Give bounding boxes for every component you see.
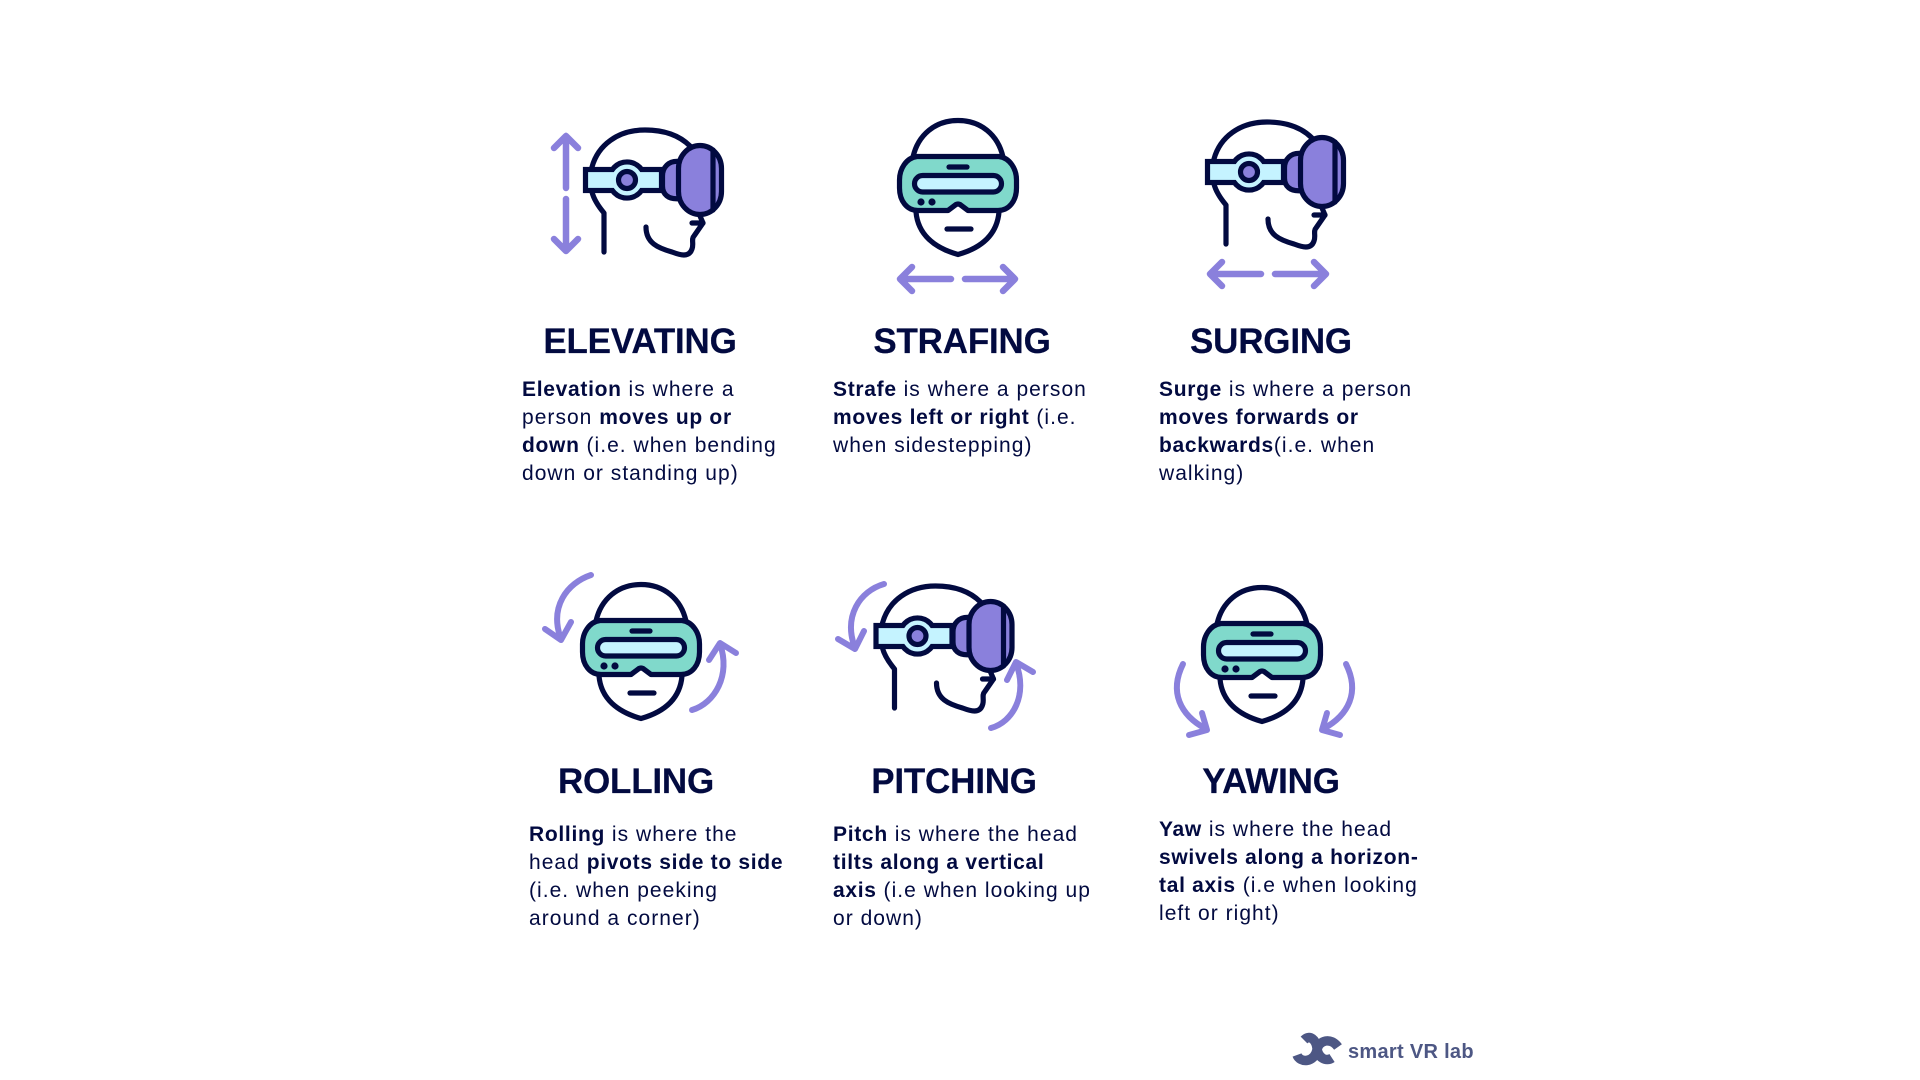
text: surging [1159,378,1412,485]
arrows: rotation [545,575,736,710]
arrows: up and down [554,136,578,251]
text: yawing: tal axis (i.e when looking [1159,874,1418,897]
text: pitching [833,823,1091,930]
text: yawing [1159,818,1419,925]
text: pitching: Pitch is where the head [833,823,1078,846]
heading: pitching: PITCHING [871,762,1037,801]
arrows: left and right [900,267,1015,291]
arrows: rotation [838,584,1033,728]
arrows: forwards and backwards [1210,262,1326,286]
text: pitching: axis (i.e when looking up [833,879,1091,902]
text: strafing: Strafe is where a person [833,378,1087,401]
heading: rolling: ROLLING [558,762,714,801]
text: rolling [529,823,783,930]
text: elevating [522,378,777,485]
text: surging: moves forwards or [1159,406,1359,429]
heading: elevating: ELEVATING [543,322,737,361]
head: front view with headset [582,584,700,718]
text: pitching: or down) [833,907,923,930]
logo text: smart VR lab [1348,1041,1474,1063]
text: pitching: tilts along a vertical [833,851,1044,874]
text: yawing: swivels along a horizon- [1159,846,1419,869]
arrows: rotation [1177,664,1352,735]
text: elevating: down (i.e. when bending [522,434,777,457]
icon: surging [1208,122,1344,286]
icon: yawing [1177,588,1352,735]
text: rolling: head pivots side to side [529,851,783,874]
text: surging: walking) [1159,462,1244,485]
text: elevating: down or standing up) [522,462,739,485]
text: strafing: when sidestepping) [833,434,1032,457]
icon: smart VR lab logo mark [1297,1038,1338,1060]
text: surging: Surge is where a person [1159,378,1412,401]
head: side view with headset [586,130,722,255]
text: rolling: (i.e. when peeking [529,879,718,902]
head: side view with headset [876,586,1012,711]
heading: strafing: STRAFING [873,322,1051,361]
text: yawing: left or right) [1159,902,1280,925]
text: surging: backwards(i.e. when [1159,434,1375,457]
head: front view with headset [1204,588,1320,722]
text: elevating: Elevation is where a [522,378,735,401]
heading: surging: SURGING [1190,322,1352,361]
head: front view with headset [900,120,1016,254]
text: strafing [833,378,1087,457]
text: strafing: moves left or right (i.e. [833,406,1077,429]
icon: pitching [838,584,1033,728]
icon: strafing [900,120,1016,291]
text: rolling: Rolling is where the [529,823,738,846]
head: side view with headset [1208,122,1344,247]
text: elevating: person moves up or [522,406,732,429]
icon: elevating [554,130,722,255]
text: yawing: Yaw is where the head [1159,818,1392,841]
icon: rolling [545,575,736,718]
heading: yawing: YAWING [1202,762,1340,801]
text: rolling: around a corner) [529,907,701,930]
